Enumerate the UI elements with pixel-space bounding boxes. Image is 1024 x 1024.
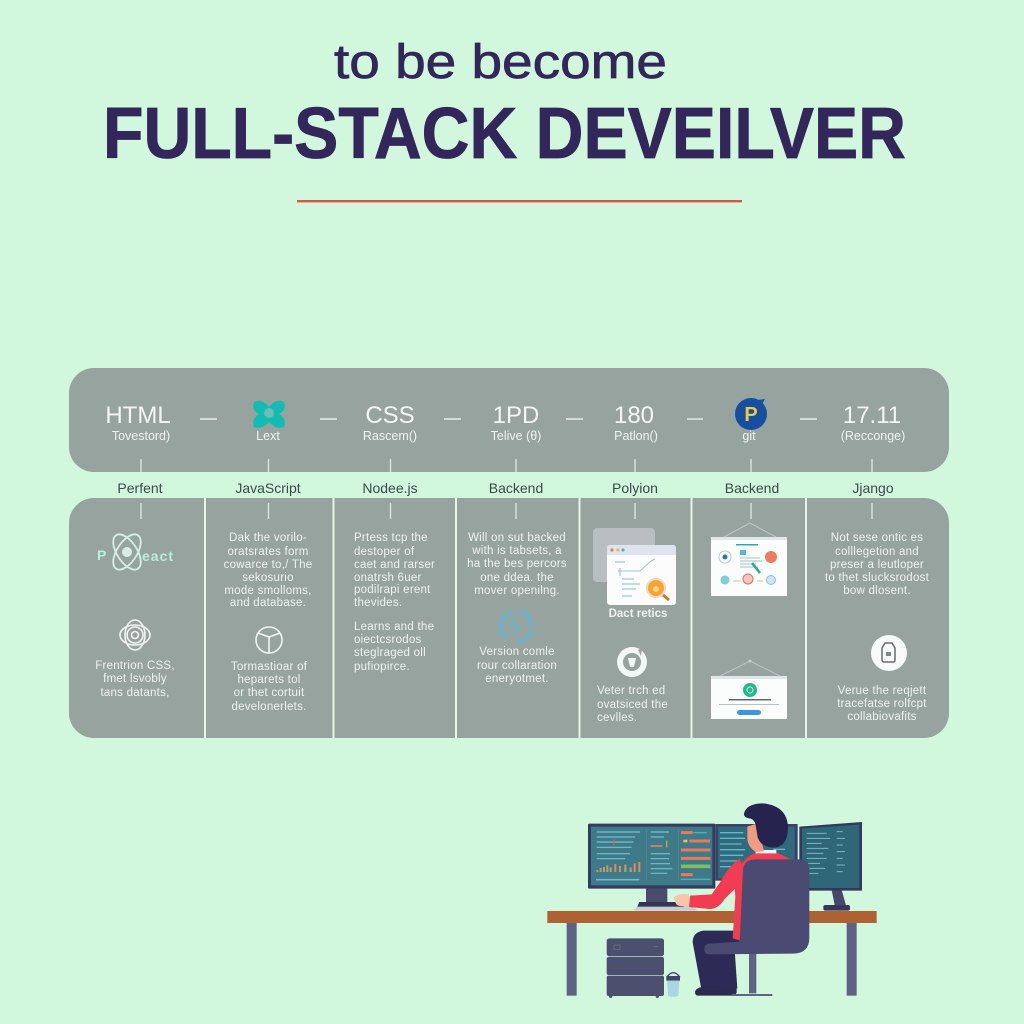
1PD label: 1PD <box>493 402 539 429</box>
column 3: Node.js text: destoper of <box>354 546 415 558</box>
icon: teal butterfly logo <box>253 401 285 443</box>
CSS label: Rascem() <box>363 429 417 443</box>
hand <box>673 894 689 906</box>
column 7: Django text and icon: bow dlosent. <box>843 585 911 597</box>
column headings between panels <box>117 480 894 496</box>
icon: white circle with jar <box>871 635 907 671</box>
column 2 lower text: develonerlets. <box>231 701 307 713</box>
column headings between panels: Nodee.js <box>362 480 418 496</box>
column 3: Node.js text: pufiopirce. <box>354 661 410 673</box>
column 7: Django text and icon: to thet slucksrodost <box>825 572 930 584</box>
column 2 lower text: heparets tol <box>237 674 301 686</box>
cup <box>666 973 680 997</box>
column 3: Node.js text: onatrsh 6uer <box>354 572 422 584</box>
column 4: Backend text and icon: mover openilng. <box>474 585 560 597</box>
icon: blue globe arrows <box>501 611 531 642</box>
column 5 lower text: cevlles. <box>597 712 637 724</box>
column 2 lower text: or thet cortuit <box>234 687 305 699</box>
icon: circle glyph <box>256 627 282 653</box>
column 2: JavaScript text: oratsrates form <box>227 546 309 558</box>
computer tower <box>607 938 664 998</box>
left monitor <box>588 824 715 903</box>
column 5 lower text: Veter trch ed <box>597 685 665 697</box>
icon: blue P logo with git label <box>735 398 767 443</box>
column 7: Django text and icon: Not sese ontic es <box>831 532 923 544</box>
17.11 label <box>841 402 905 443</box>
column 4 lower text <box>477 646 557 685</box>
column 4: Backend text and icon: ha the bes percors <box>467 558 567 570</box>
column headings between panels: Jjango <box>852 480 894 496</box>
right monitor <box>799 822 862 911</box>
17.11 label: 17.11 <box>843 402 901 429</box>
180 label: Patlon() <box>614 429 658 443</box>
connector ticks <box>141 459 872 519</box>
1PD label <box>491 402 541 443</box>
column headings between panels: JavaScript <box>235 480 301 496</box>
column 4: Backend text and icon: one ddea. the <box>480 572 554 584</box>
column headings between panels: Perfent <box>117 480 163 496</box>
hair <box>744 803 788 847</box>
CSS label <box>363 402 417 443</box>
desk <box>547 911 877 996</box>
column 1 text: fmet lsvobly <box>103 673 167 685</box>
panel: bottom detail columns <box>69 498 949 738</box>
column headings between panels: Backend <box>489 480 543 496</box>
neck and face <box>747 823 764 852</box>
column 3: Node.js text: thevides. <box>354 597 402 609</box>
hanging card 1 <box>711 523 787 596</box>
column 1 text <box>95 660 175 699</box>
column 4: Backend text and icon <box>467 532 567 685</box>
react wordmark <box>97 547 174 564</box>
keyboard <box>633 902 698 911</box>
column 2: JavaScript text: and database. <box>230 597 306 609</box>
column 2: JavaScript text: Dak the vorilo- <box>229 532 307 544</box>
person <box>673 803 792 996</box>
column 5: dashboard illustration and text <box>593 528 676 724</box>
column 3: Node.js text: oiectcsrodos <box>354 634 422 646</box>
dashboard caption: Dact retics <box>609 608 667 620</box>
icon: blue P logo with git label: git <box>742 429 756 443</box>
180 label <box>614 402 658 443</box>
column 4: Backend text and icon: with is tabsets, a <box>471 545 562 557</box>
column 1: react logo and text <box>95 530 175 699</box>
column 4 lower text: Version comle <box>479 646 555 658</box>
dashboard card illustration <box>593 528 676 605</box>
180 label: 180 <box>614 402 654 429</box>
column 2: JavaScript text: cowarce to,/ The <box>224 559 312 571</box>
panel: top technology timeline <box>69 368 949 472</box>
column 3: Node.js text: steglraged oll <box>354 647 426 659</box>
column 7 lower text <box>837 685 927 723</box>
legs <box>693 931 742 989</box>
column 3: Node.js text: podilrapi erent <box>354 584 431 596</box>
react wordmark: eact <box>142 548 174 564</box>
column 3: Node.js text: caet and rarser <box>354 559 435 571</box>
column headings between panels: Polyion <box>612 480 658 496</box>
column 2: JavaScript text: mode smolloms, <box>224 585 312 597</box>
column 2: JavaScript text <box>224 532 312 713</box>
torso and arm <box>733 853 792 950</box>
column 2: JavaScript text: sekosurio <box>242 572 294 584</box>
HTML label <box>105 402 171 443</box>
CSS label: CSS <box>365 402 415 429</box>
HTML label: HTML <box>105 402 171 429</box>
column 1 text: tans datants, <box>100 687 170 699</box>
icon: teal butterfly logo: Lext <box>256 429 280 443</box>
column 7 lower text: collabiovafits <box>847 711 917 723</box>
title: to be become: to be become <box>334 36 667 89</box>
column 5 lower text <box>597 685 668 724</box>
column 4 lower text: rour collaration <box>477 660 557 672</box>
timeline dashes <box>200 418 817 420</box>
column 3: Node.js text <box>354 532 435 673</box>
column 5 lower text: ovatsiced the <box>597 699 668 711</box>
17.11 label: (Recconge) <box>841 429 905 443</box>
icon: flower <box>120 620 150 650</box>
column 3: Node.js text: Learns and the <box>354 621 434 633</box>
red title underline <box>297 200 742 202</box>
column 6: hanging screenshots <box>711 523 787 719</box>
icon: react atom <box>108 530 146 574</box>
illustration: developer at desk <box>547 803 877 998</box>
column 7 lower text: Verue the reqjett <box>838 685 927 697</box>
icon: blue P logo with git label: P <box>744 404 758 426</box>
hanging card 2 <box>711 660 787 719</box>
column headings between panels: Backend <box>725 480 779 496</box>
column 4 lower text: eneryotmet. <box>485 673 549 685</box>
column 7: Django text and icon <box>825 532 930 723</box>
title: FULL-STACK DEVEILVER: FULL-STACK DEVEILVER <box>103 94 906 174</box>
column 7 lower text: tracefatse rolfcpt <box>837 698 927 710</box>
column 7: Django text and icon: colllegetion and <box>835 546 919 558</box>
column 7: Django text and icon: preser a leutloper <box>830 559 924 571</box>
react wordmark: P <box>97 547 107 563</box>
icon: white badge <box>617 647 647 677</box>
column 2 lower text <box>231 661 308 713</box>
1PD label: Telive (θ) <box>491 429 541 443</box>
chair <box>704 859 809 996</box>
column 1 text: Frentrion CSS, <box>95 660 175 672</box>
column 3: Node.js text: Prtess tcp the <box>354 532 428 544</box>
HTML label: Tovestord) <box>112 429 170 443</box>
column 4: Backend text and icon: Will on sut backed <box>468 532 566 544</box>
column 2 lower text: Tormastioar of <box>231 661 308 673</box>
middle monitor <box>715 824 798 881</box>
